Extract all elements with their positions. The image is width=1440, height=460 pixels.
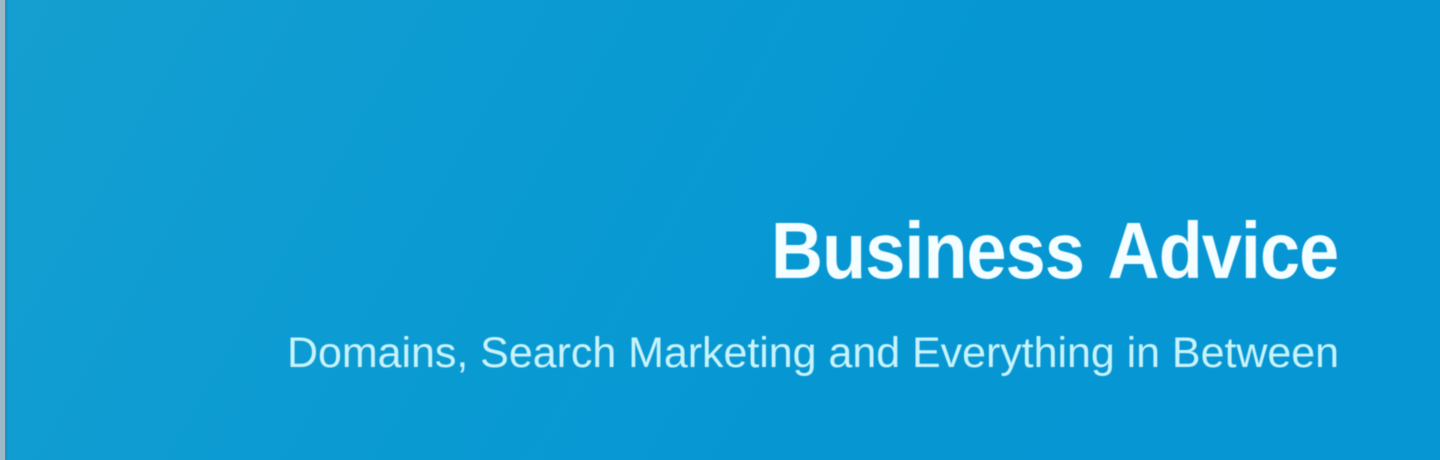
subtitle: Domains, Search Marketing and Everything in Between xyxy=(287,329,1339,377)
title: Business Advice xyxy=(771,206,1338,295)
